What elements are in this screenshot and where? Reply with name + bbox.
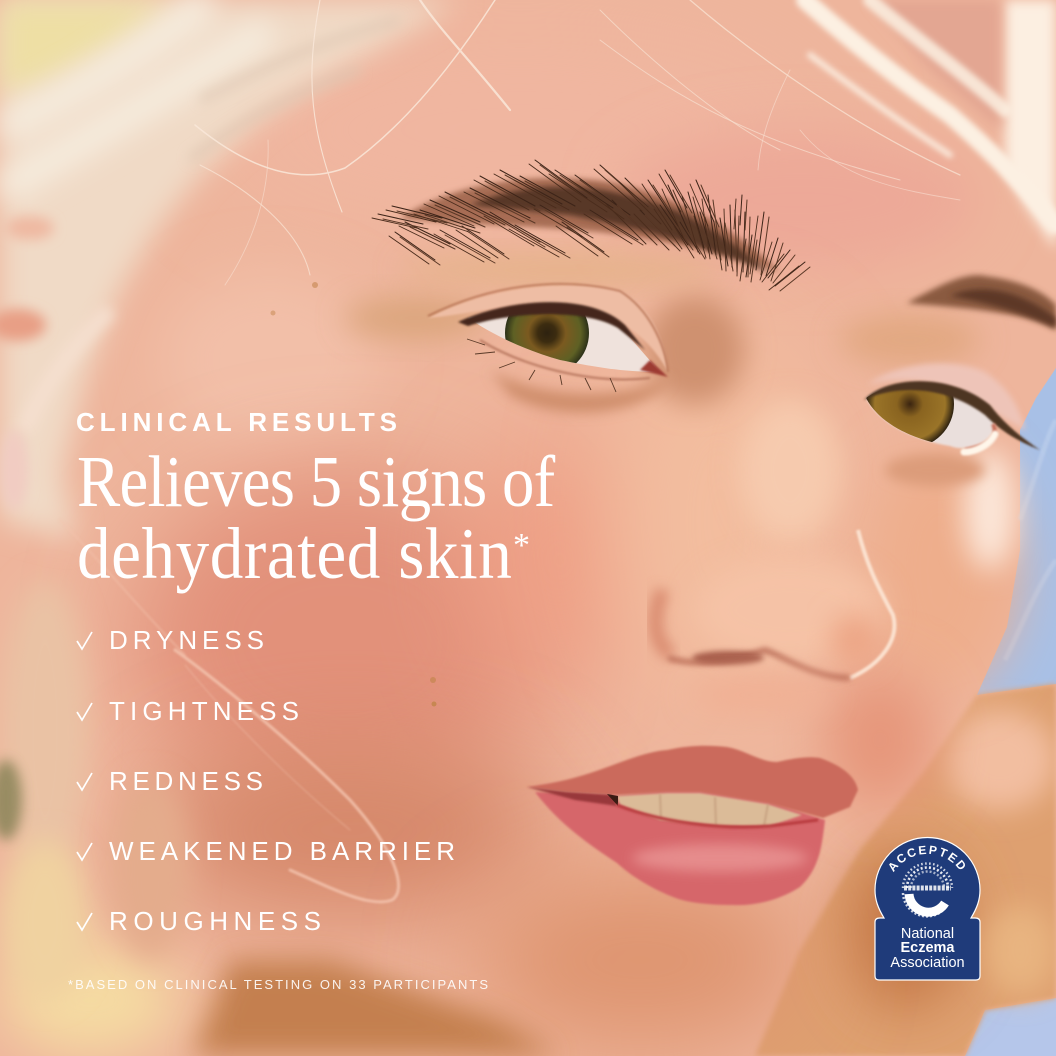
badge: National Eczema Association accepted: ACCEPTED bbox=[889, 846, 965, 872]
item: roughness: ROUGHNESS bbox=[109, 906, 321, 936]
headline bbox=[77, 442, 555, 595]
hair: top right bbox=[805, 0, 1056, 250]
skin: shoulder bbox=[755, 684, 1056, 1056]
badge: National Eczema Association accepted: Association bbox=[890, 955, 965, 971]
eye: left bbox=[428, 284, 668, 392]
freckles bbox=[270, 282, 436, 706]
lips bbox=[527, 746, 858, 905]
item: redness: REDNESS bbox=[109, 766, 263, 796]
footnote: *BASED ON CLINICAL TESTING ON 33 PARTICIPANTS bbox=[68, 977, 488, 992]
icon: eczema e bbox=[903, 863, 952, 916]
eyebrow: right bbox=[907, 275, 1056, 330]
eye: right bbox=[864, 360, 1040, 452]
badge: National Eczema Association accepted bbox=[874, 836, 981, 981]
kicker: clinical results: CLINICAL RESULTS bbox=[76, 407, 397, 437]
loose hair strand on cheek bbox=[60, 520, 399, 902]
badge: National Eczema Association accepted: Eczema bbox=[900, 940, 955, 956]
item: weakened barrier: WEAKENED BARRIER bbox=[109, 836, 455, 866]
headline: dehydrated skin bbox=[77, 515, 512, 595]
item: dryness: DRYNESS bbox=[109, 625, 264, 655]
headline: Relieves 5 signs of bbox=[77, 442, 555, 522]
checklist bbox=[77, 625, 455, 936]
headline: * bbox=[513, 527, 530, 564]
eye socket shadows bbox=[345, 254, 985, 486]
neck shadow and soft left edge bbox=[0, 580, 560, 1056]
item: tightness: TIGHTNESS bbox=[109, 696, 299, 726]
hair: top left bbox=[0, 0, 460, 540]
fine hair strands bbox=[195, 0, 960, 285]
nose bbox=[656, 400, 894, 715]
background: blue sky right bbox=[965, 368, 1056, 1056]
eyebrow: left bbox=[372, 160, 810, 291]
badge: National Eczema Association accepted: National bbox=[901, 926, 954, 942]
